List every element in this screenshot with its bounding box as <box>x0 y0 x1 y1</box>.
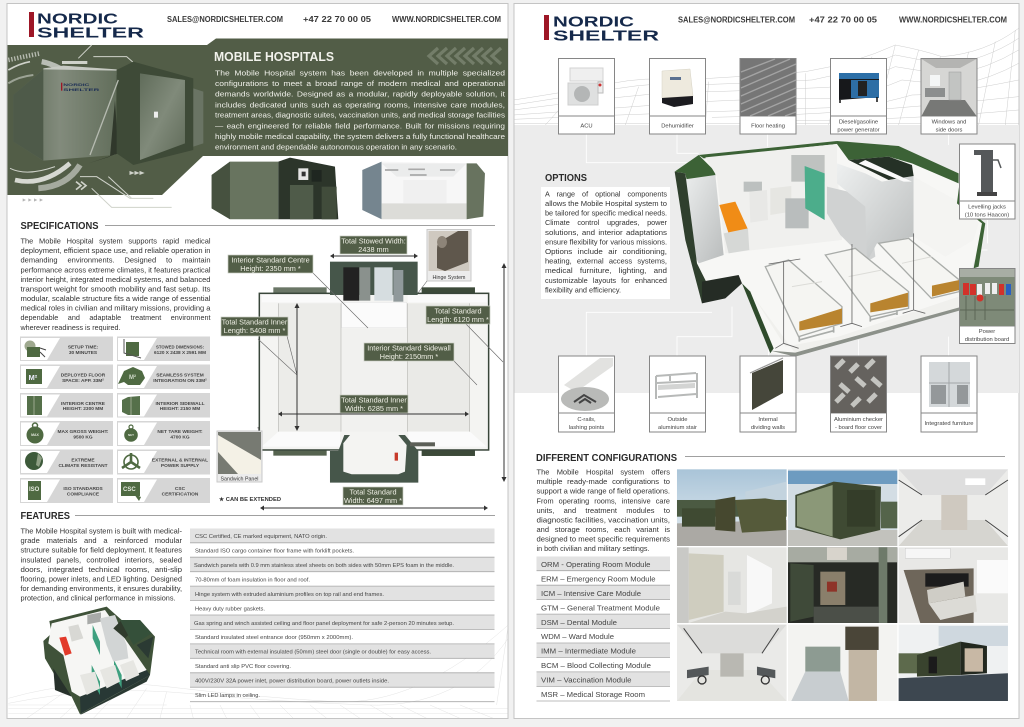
spec tile: csc certification: CSC <box>123 487 136 493</box>
text block: options: A range of optional components <box>545 190 667 198</box>
features table: Standard anti slip PVC floor covering. <box>195 664 291 670</box>
option tile: ACU: ACU <box>580 124 593 130</box>
module list: ORM - Operating Room Module <box>541 560 650 569</box>
contact details: right header: +47 22 70 00 05 <box>809 16 878 24</box>
spec tile: max gross weight: MAX GROSS WEIGHT: <box>58 429 109 435</box>
spec tile: interior sidewall height <box>117 393 210 418</box>
image: container with white interior <box>362 162 485 219</box>
spec tile: setup time: SETUP TIME: <box>68 344 99 350</box>
features table: CSC Certified, CE marked equipment, NATO origin. <box>195 534 327 540</box>
text block: options: solutions, and interior adaptations <box>545 228 667 237</box>
module list: DSM – Dental Module <box>541 618 617 627</box>
text block: features: protection, and clinical performance in missions. <box>20 594 176 603</box>
spec tile: interior centre height <box>20 393 113 418</box>
features table: Technical room with external insulated (50mm) steel door (single or double) for easy access. <box>195 650 431 656</box>
option tile: internal dividing walls <box>740 356 796 432</box>
photo 5: generator room <box>788 547 897 623</box>
label: total standard inner width: Width: 6285 mm * <box>345 404 403 413</box>
label: interior standard centre height: Interior Standard Centre <box>231 256 310 264</box>
text block: configurations: diagnostic facilities, vaccination units, <box>536 515 670 524</box>
label: total standard width <box>343 487 403 505</box>
image: 3D cutaway of mobile hospital <box>675 141 985 357</box>
logo: right header: NORDIC <box>553 14 634 30</box>
photo grid <box>677 469 1008 701</box>
spec tile: setup time <box>20 336 113 361</box>
module list: VIM – Vaccination Module <box>541 676 632 685</box>
spec tile: max gross weight: MAX <box>31 433 40 437</box>
text block: hero intro: includes dedicated units such as operating rooms, intensive care modules, <box>215 100 505 109</box>
heading: mobile hospitals: MOBILE HOSPITALS <box>214 50 334 64</box>
text block: hero intro: The Mobile Hospital system has been developed in multiple specialized <box>215 68 505 78</box>
image: open mobile hospital container: NORDIC <box>63 82 90 87</box>
option tile: outside aluminium stair <box>650 356 706 432</box>
spec tile: seamless system: M² <box>129 374 136 381</box>
sub: beds <box>765 260 842 337</box>
option tile: c-rails: lashing points <box>569 425 604 431</box>
features table: Hinge system with extruded aluminium profiles on top rail and end frames. <box>195 592 384 598</box>
text block: hero intro: demands worldwide. Designed as a modular, rapidly deployable solution, it <box>215 90 506 99</box>
spec tile: deployed floor space <box>20 364 113 389</box>
photo 8: interior with cabinet <box>788 625 897 701</box>
spec tile: csc certification: CSC <box>175 486 186 492</box>
decorative chevrons <box>429 48 501 64</box>
text block: configurations: units, and treatment modules to <box>536 506 670 515</box>
features table: 400V/230V 32A power inlet, power distribution board, power outlets inside. <box>195 679 389 685</box>
photo 1: containers on site <box>677 469 787 546</box>
dimension arrows <box>260 254 506 510</box>
text block: specifications: performance across extreme climates, it features practical <box>20 265 211 274</box>
option tile: aluminium checker board: Aluminium checker <box>834 417 883 423</box>
option tile: floor heating <box>740 58 796 134</box>
option tile: dehumidifier <box>650 58 706 134</box>
text block: options: Climate control upgrades, power <box>545 218 668 227</box>
text block: hero intro: — each engineered for reliable field performance. Built for missions requiring <box>215 121 505 130</box>
spec tile: csc certification <box>117 478 210 503</box>
module list <box>536 556 670 701</box>
heading: specifications: SPECIFICATIONS <box>20 220 98 232</box>
text block: hero intro: environment and dependable autonomous operation in any scenario. <box>215 143 457 152</box>
label: total standard inner width <box>340 395 408 413</box>
photo 4: entrance door interior <box>677 547 787 623</box>
option tile: aluminium checker board: - board floor cover <box>835 425 882 431</box>
image: container with open technical room <box>212 158 338 219</box>
decorative hud marks <box>8 45 172 207</box>
spec tile: power supply: EXTERNAL & INTERNAL <box>152 458 208 464</box>
note: can be extended: ★ CAN BE EXTENDED <box>219 496 281 503</box>
text block: options <box>541 187 670 299</box>
features table: Slim LED lamps in ceiling. <box>195 693 260 699</box>
option tile: outside aluminium stair: aluminium stair <box>658 425 697 431</box>
text block: hero intro: highly mobile medical capability, the system delivers a fully functional healthcare <box>215 132 505 141</box>
contact details: left header <box>167 15 501 24</box>
label: total standard width: Width: 6497 mm * <box>344 496 402 505</box>
option tile: windows and side doors <box>921 58 977 134</box>
features table: Sandwich panels with 0.9 mm stainless steel sheets on both sides with 50mm EPS foam in the middle. <box>194 563 454 569</box>
text block: specifications <box>20 236 211 332</box>
text block: features <box>20 526 183 603</box>
text block: hero intro <box>215 68 506 152</box>
module list: ERM – Emergency Room Module <box>541 574 656 583</box>
spec tile: seamless system <box>117 364 210 389</box>
module list: IMM – Intermediate Module <box>541 647 636 656</box>
sub: trolley cabinets <box>744 182 762 192</box>
text block: specifications: medical roles in civilian and military missions, providing a <box>20 304 210 313</box>
spec tile: net tare weight: 4700 KG <box>170 434 190 440</box>
text block: configurations <box>536 468 670 553</box>
spec tile: stowed dimensions: STOWED DIMENSIONS: <box>156 344 204 350</box>
label: interior standard sidewall height: Interior Standard Sidewall <box>367 344 451 352</box>
panel: right page <box>514 4 1019 718</box>
text block: features: doors, integrated technical rooms, anti-slip <box>20 565 182 574</box>
text block: specifications: demanding environments. Designed to maintain <box>20 256 210 265</box>
image: open mobile hospital container <box>13 62 203 165</box>
text block: options: ensure flexibility for various missions. <box>545 237 667 246</box>
module list: BCM – Blood Collecting Module <box>541 661 651 670</box>
option tile: ACU <box>558 58 614 134</box>
contact details: left header: SALES@NORDICSHELTER.COM <box>167 15 283 24</box>
logo: right header <box>544 14 659 44</box>
logo: right header: SHELTER <box>553 28 659 44</box>
spec tile: stowed dimensions <box>117 336 210 361</box>
floor plan diagram <box>217 230 506 510</box>
spec tile: deployed floor space: M² <box>28 373 38 382</box>
option tile: c-rails <box>558 356 614 432</box>
callout: hinge system: Hinge System <box>433 275 466 281</box>
image: small 3D floor plan <box>43 607 155 714</box>
spec tile: net tare weight: NET <box>128 433 134 437</box>
text block: features: The Mobile Hospital system is built with medical- <box>20 526 183 536</box>
spec tile: iso standards: COMPLIANCE <box>67 492 100 498</box>
contact details: left header: +47 22 70 00 05 <box>303 15 372 24</box>
option tile: windows and side doors: Windows and <box>932 120 966 126</box>
spec tile: setup time: 30 MINUTES <box>69 350 98 356</box>
text block: specifications: The Mobile Hospital system supports rapid medical <box>20 236 211 246</box>
spec tile: net tare weight: NET TARE WEIGHT: <box>157 429 203 435</box>
option tile: power distribution board: Power <box>979 329 995 335</box>
option tile: c-rails: C-rails, <box>577 417 596 423</box>
spec tile: iso standards: ISO STANDARDS <box>63 486 103 492</box>
logo: left header <box>29 10 144 42</box>
panel: olive hero band <box>8 38 508 195</box>
features table: Standard insulated steel entrance door (950mm x 2000mm). <box>195 635 353 641</box>
option tile: floor heating: Floor heating <box>751 124 785 130</box>
text block: configurations: multiple ready-made configurations to <box>536 477 670 486</box>
sub: central partition and cabinets <box>827 187 875 262</box>
text block: configurations: designed to meet specific requirements <box>536 535 670 544</box>
sub: wall chart <box>791 155 825 182</box>
spec tile: power supply: POWER SUPPLY <box>161 463 200 469</box>
contact details: right header: WWW.NORDICSHELTER.COM <box>899 16 1007 24</box>
label: total stowed width: Total Stowed Width: <box>341 236 406 246</box>
option tile: generator: power generator <box>837 128 880 134</box>
spec tile: stowed dimensions: 6120 X 2438 X 2591 MM <box>154 350 206 356</box>
dimension leaders <box>258 273 503 385</box>
spec tile: max gross weight <box>20 421 113 446</box>
text block: features: structure suitable for field deployment. It features <box>20 546 182 555</box>
features table: 70-80mm of foam insulation in floor and roof. <box>195 577 310 583</box>
spec tile: extreme climate: EXTREME <box>71 458 95 464</box>
text block: specifications: deployment, efficient space use, and reliable operation in <box>20 246 210 255</box>
option tile: power distribution board: distribution board <box>965 337 1009 343</box>
panel: options grey band <box>514 125 1019 393</box>
text block: specifications: modular, scalable structure fits a wide range of essential <box>20 294 211 303</box>
text block: options: flexibility and efficiency. <box>545 285 621 294</box>
label: total standard inner length: Total Standard Inner <box>222 318 288 326</box>
heading: features: FEATURES <box>20 510 70 522</box>
text block: options: Options include air conditioning, <box>545 247 667 256</box>
module list: ICM – Intensive Care Module <box>541 589 641 598</box>
text block: configurations: support a wide range of field operations. <box>536 487 670 496</box>
option tile: outside aluminium stair: Outside <box>668 417 687 423</box>
label: total standard inner length <box>221 317 288 336</box>
text block: features: insulated panels, controlled interiors, sealed <box>20 555 182 564</box>
label: interior standard centre height <box>228 255 313 273</box>
wireframe: bottom of left page <box>8 625 508 718</box>
spec tile: deployed floor space: DEPLOYED FLOOR <box>61 372 106 378</box>
connector lines <box>586 133 988 356</box>
contact details: right header: SALES@NORDICSHELTER.COM <box>678 16 795 24</box>
spec tile: iso standards <box>20 478 113 503</box>
label: interior standard centre height: Height: 2350 mm * <box>240 264 301 273</box>
spec tile: extreme climate <box>20 450 113 474</box>
callout: sandwich panel: Sandwich Panel <box>220 476 258 482</box>
text block: hero intro: configurations to meet a broad range of modern medical and operational <box>215 79 505 88</box>
text block: options: customizable layouts for enhanced <box>545 276 667 285</box>
spec tile: deployed floor space: SPACE: APP. 33M² <box>62 378 104 384</box>
text block: specifications: transport weight for smooth mobility and fast setup. Its <box>20 284 211 293</box>
label: total standard width: Total Standard <box>349 488 397 496</box>
logo: left header: NORDIC <box>37 10 118 28</box>
photo 7: interior with stretchers <box>677 625 787 701</box>
option tile: internal dividing walls: Internal <box>758 417 778 423</box>
spec tile: interior sidewall height: HEIGHT: 2150 MM <box>160 406 200 412</box>
option tile: power distribution board <box>960 268 1015 344</box>
spec tile: interior sidewall height: INTERIOR SIDEWALL <box>155 401 205 407</box>
spec tile: seamless system: INTEGRATION ON 33M² <box>153 378 207 384</box>
plan: shelter top view <box>259 262 489 483</box>
spec tile: net tare weight <box>117 421 210 446</box>
image: open mobile hospital container: SHELTER <box>63 87 100 92</box>
label: total stowed width <box>340 236 407 254</box>
spec tile: iso standards: ISO <box>29 487 40 493</box>
text block: options: be tailored for specific medical needs. <box>545 209 667 218</box>
spec tile: power supply <box>117 450 210 474</box>
option tile: integrated furniture <box>921 356 977 432</box>
text block: configurations: The Mobile Hospital system offers <box>536 468 670 476</box>
option tile: integrated furniture: Integrated furniture <box>925 421 973 427</box>
module list: GTM – General Treatment Module <box>541 603 660 612</box>
photo 6: drawers and AC <box>899 547 1008 623</box>
label: interior standard sidewall height <box>364 343 454 361</box>
option tile: generator <box>830 58 886 134</box>
features table: Standard ISO cargo container floor frame with forklift pockets. <box>195 548 354 554</box>
label: interior standard sidewall height: Height: 2150mm * <box>380 352 438 361</box>
text block: configurations: in both civilian and military settings. <box>536 544 650 553</box>
panel: left page <box>7 4 508 718</box>
wireframe: top of right page <box>514 28 1019 125</box>
callout: sandwich panel <box>217 427 262 482</box>
text block: configurations: From operating rooms, intensive care <box>536 496 670 505</box>
text block: specifications: dependable and adaptable treatment environment <box>20 313 210 322</box>
option tile: internal dividing walls: dividing walls <box>751 425 785 431</box>
logo: left header: SHELTER <box>37 24 144 42</box>
text block: options: allows the Mobile Hospital system to <box>545 199 667 208</box>
option tile: generator: Diesel/gasoline <box>839 120 878 126</box>
spec tile: interior centre height: INTERIOR CENTRE <box>61 401 106 407</box>
label: total stowed width: 2438 mm <box>358 245 389 254</box>
contact details: right header <box>678 16 1007 24</box>
features table <box>190 528 494 702</box>
heading: options: OPTIONS <box>545 172 587 184</box>
contact details: left header: WWW.NORDICSHELTER.COM <box>392 15 501 24</box>
label: total standard length: Length: 6120 mm * <box>427 315 489 324</box>
features table: Heavy duty rubber gaskets. <box>195 606 265 612</box>
text block: specifications: wherever readiness is required. <box>20 323 120 332</box>
option tile: levelling jacks: Levelling jacks <box>968 204 1006 210</box>
text block: hero intro: treatment areas, diagnostic suites, vaccination units, and medical storage facilities <box>215 111 505 120</box>
text block: features: for demanding environments, it ensures durability, <box>20 584 182 593</box>
option tile: levelling jacks: (10 tons Haacon) <box>965 212 1009 218</box>
text block: features: flooring, power inlets, and LED lighting. Designed <box>20 574 182 584</box>
spec tile: max gross weight: 9500 KG <box>73 434 93 440</box>
photo 2: container exterior <box>788 469 897 546</box>
label: total standard length: Total Standard <box>434 306 482 316</box>
label: total standard length <box>426 306 490 324</box>
sub: orange table <box>719 202 748 233</box>
text block: options: medical furniture, lighting, and <box>545 266 667 275</box>
text block: options: heating, external access systems, <box>545 257 667 266</box>
option tile: windows and side doors: side doors <box>936 128 962 134</box>
photo 3: white interior <box>899 469 1008 546</box>
module list: WDM – Ward Module <box>541 632 614 641</box>
spec tile: extreme climate: CLIMATE RESISTANT <box>58 463 108 469</box>
text block: specifications: interior height, integrated medical systems, and balanced <box>20 275 210 284</box>
option tile: aluminium checker board <box>830 356 886 432</box>
module list: MSR – Medical Storage Room <box>541 690 645 699</box>
option tile: levelling jacks <box>960 144 1015 219</box>
spec tile: seamless system: SEAMLESS SYSTEM <box>156 372 204 378</box>
callout: hinge system <box>427 230 471 281</box>
label: total standard inner width: Total Standard Inner <box>341 396 407 404</box>
spec tile: csc certification: CERTIFICATION <box>162 492 199 498</box>
features table: Gas spring and winch assisted ceiling and floor panel deployment for safe 2-person 20 minutes setup. <box>194 621 454 627</box>
spec tile: interior centre height: HEIGHT: 2300 MM <box>63 406 103 412</box>
text block: features: grade materials and a reinforced modular <box>20 536 183 545</box>
photo 9: deployed shelter exterior <box>899 625 1008 701</box>
label: total standard inner length: Length: 5408 mm * <box>224 326 285 335</box>
text block: configurations: and storage rooms, each variant is <box>536 525 670 534</box>
heading: different configurations: DIFFERENT CONFIGURATIONS <box>536 452 677 464</box>
option tile: dehumidifier: Dehumidifier <box>661 124 694 130</box>
